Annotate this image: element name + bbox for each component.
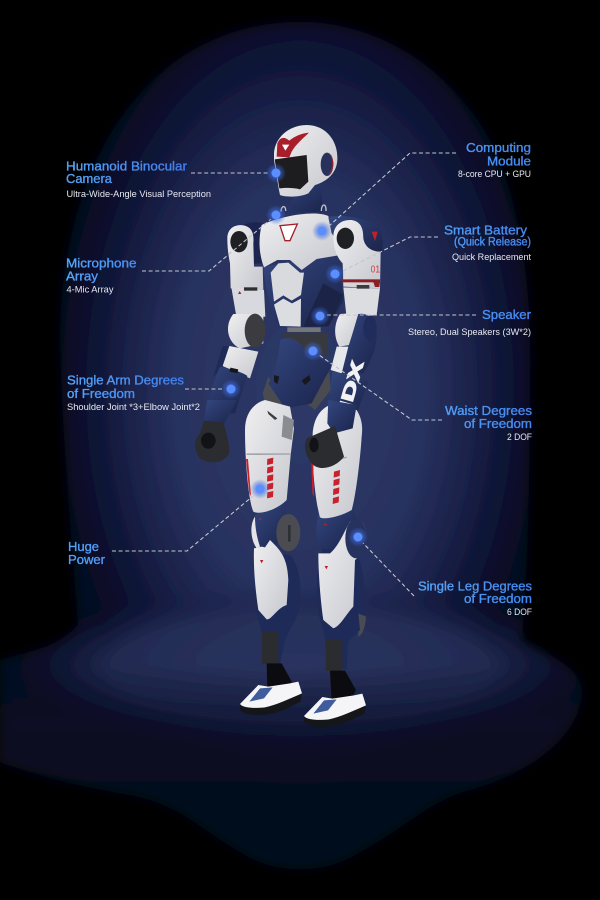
line: waist bbox=[319, 355, 442, 420]
left arm bbox=[206, 222, 265, 413]
dot: battery bbox=[325, 264, 345, 284]
label: smart battery: Quick Replacement bbox=[452, 252, 531, 263]
left leg bbox=[245, 400, 301, 693]
lower torso bbox=[263, 255, 344, 327]
dot: computing bbox=[312, 221, 332, 241]
label: waist degrees of freedom: 2 DOF bbox=[507, 432, 532, 443]
dot: power bbox=[250, 479, 270, 499]
label: computing module: Module bbox=[487, 154, 531, 168]
callout lines bbox=[112, 153, 476, 596]
label: microphone array bbox=[66, 256, 136, 296]
label: speaker: Speaker bbox=[482, 307, 532, 322]
label: single arm degrees of freedom: of Freedom bbox=[67, 386, 135, 401]
label: smart battery: Smart Battery bbox=[444, 222, 528, 238]
label: waist degrees of freedom: of Freedom bbox=[464, 416, 532, 431]
label: huge power: Huge bbox=[68, 539, 99, 554]
dot: arm bbox=[221, 379, 241, 399]
label: computing module: Computing bbox=[466, 140, 531, 155]
robot bbox=[195, 125, 383, 727]
left shoe bbox=[240, 682, 302, 715]
left fist bbox=[195, 421, 229, 462]
label: single arm degrees of freedom bbox=[67, 372, 200, 413]
label: single leg degrees of freedom: of Freedom bbox=[464, 591, 532, 606]
neck bbox=[282, 182, 323, 213]
label: computing module bbox=[458, 140, 531, 180]
right arm: 01 bbox=[371, 264, 380, 275]
right leg bbox=[311, 405, 367, 702]
robot lower body bbox=[195, 400, 367, 727]
label: smart battery: (Quick Release) bbox=[454, 236, 531, 248]
pelvis bbox=[263, 327, 332, 410]
label: microphone array: Array bbox=[66, 268, 99, 284]
label: speaker bbox=[408, 307, 532, 338]
right arm: IDX bbox=[335, 358, 368, 412]
label: waist degrees of freedom: Waist Degrees bbox=[445, 403, 532, 418]
right arm bbox=[328, 216, 383, 413]
chest triangle bbox=[280, 224, 297, 241]
label: single leg degrees of freedom: Single Leg Degrees bbox=[418, 578, 532, 594]
dot: speaker bbox=[310, 306, 330, 326]
label: humanoid binocular camera bbox=[66, 158, 211, 200]
helmet bbox=[274, 125, 337, 197]
left forearm bbox=[204, 400, 237, 425]
right fist bbox=[305, 426, 344, 468]
chest plate bbox=[260, 214, 338, 270]
dot: camera bbox=[266, 163, 286, 183]
label: microphone array: 4-Mic Array bbox=[66, 284, 114, 296]
label: single arm degrees of freedom: Shoulder Joint *3+Elbow Joint*2 bbox=[67, 402, 200, 413]
dot: waist bbox=[303, 341, 323, 361]
line: power bbox=[112, 496, 253, 551]
right forearm bbox=[327, 400, 357, 433]
line: speaker bbox=[327, 314, 476, 316]
label: smart battery bbox=[444, 222, 531, 263]
line: leg bbox=[363, 543, 414, 596]
right shoe bbox=[304, 694, 366, 727]
line: battery bbox=[341, 237, 438, 272]
label: huge power bbox=[68, 539, 106, 567]
label: computing module: 8-core CPU + GPU bbox=[458, 169, 531, 180]
line: microphone bbox=[142, 219, 271, 271]
abdomen panels bbox=[271, 263, 304, 302]
line: camera bbox=[191, 172, 268, 174]
dots bbox=[221, 163, 368, 547]
label: single leg degrees of freedom: 6 DOF bbox=[507, 607, 532, 618]
label: single leg degrees of freedom bbox=[418, 578, 532, 618]
label: microphone array: Microphone bbox=[66, 256, 136, 270]
label: humanoid binocular camera: Camera bbox=[66, 171, 113, 186]
label: humanoid binocular camera: Humanoid Binocular bbox=[66, 158, 188, 174]
label: humanoid binocular camera: Ultra-Wide-Angle Visual Perception bbox=[66, 189, 211, 200]
label: single arm degrees of freedom: Single Arm Degrees bbox=[67, 372, 184, 388]
line: arm bbox=[185, 388, 223, 390]
robot upper body bbox=[206, 125, 383, 413]
label: speaker: Stereo, Dual Speakers (3W*2) bbox=[408, 327, 531, 338]
line: computing bbox=[329, 153, 456, 226]
label: waist degrees of freedom bbox=[445, 403, 532, 443]
dot: leg bbox=[348, 527, 368, 547]
dot: microphone bbox=[266, 205, 286, 225]
label: huge power: Power bbox=[68, 552, 106, 567]
